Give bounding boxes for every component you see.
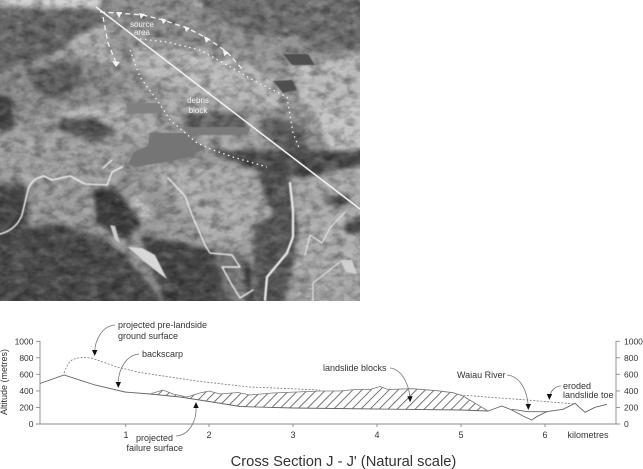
aerial photograph of landslide xyxy=(0,0,365,305)
ground profile line xyxy=(40,375,607,420)
callout: eroded landslide toe: landslide toe xyxy=(563,390,614,400)
callout: eroded landslide toe: eroded xyxy=(563,381,591,391)
section line J-J' xyxy=(96,7,360,209)
callout: landslide blocks xyxy=(323,363,413,402)
label: source area: area xyxy=(134,28,151,37)
x-axis labels: 6 xyxy=(542,430,548,440)
lakes and bright patches xyxy=(110,54,357,279)
right axis labels xyxy=(624,336,643,429)
landslide source area boundary, dashed xyxy=(100,12,243,70)
right axis labels: 600 xyxy=(624,370,638,380)
left axis labels: 600 xyxy=(19,370,34,380)
right axis labels: 200 xyxy=(624,402,638,412)
callout: projected failure surface: failure surface xyxy=(126,443,183,453)
right axis labels: 400 xyxy=(624,386,638,396)
cross-section chart xyxy=(0,320,643,453)
callout: Waiau River xyxy=(457,370,531,410)
label: source area: source xyxy=(130,20,155,29)
x-axis labels: 5 xyxy=(458,430,464,440)
label: debris block: debris xyxy=(187,96,209,105)
left axis labels: 400 xyxy=(19,386,34,396)
projected pre-landside ground surface, dashed xyxy=(64,358,575,404)
left axis labels: 0 xyxy=(29,419,34,429)
x-axis labels: 1 xyxy=(123,430,129,440)
right axis labels: 0 xyxy=(624,419,629,429)
top of landslide blocks outline xyxy=(150,386,488,411)
label: debris block xyxy=(188,97,209,113)
callout: backscarp xyxy=(116,349,183,388)
callout: Waiau River: Waiau River xyxy=(457,370,506,380)
callout: projected failure surface: projected xyxy=(136,433,173,443)
callout: projected pre-landside ground surface: projected pre-landside xyxy=(118,320,207,330)
chart axes xyxy=(36,341,620,427)
debris limits, dotted xyxy=(130,39,300,167)
callout: projected pre-landside ground surface xyxy=(92,320,207,356)
left axis labels: 800 xyxy=(19,353,34,363)
roads and rivers xyxy=(0,160,345,301)
left axis labels: 200 xyxy=(19,402,34,412)
x-axis labels xyxy=(123,430,609,440)
x-axis labels: 4 xyxy=(374,430,380,440)
right axis labels: 800 xyxy=(624,353,638,363)
label: debris block: block xyxy=(189,106,208,115)
x-axis labels: 3 xyxy=(290,430,296,440)
callout: backscarp: backscarp xyxy=(142,349,183,359)
label: source area xyxy=(130,22,154,35)
callout: landslide blocks: landslide blocks xyxy=(323,363,387,373)
left axis labels: 1000 xyxy=(15,336,34,346)
callout: projected failure surface xyxy=(126,402,199,453)
x-axis labels: 2 xyxy=(206,430,212,440)
left axis labels xyxy=(15,336,34,429)
callout: eroded landslide toe xyxy=(547,381,614,400)
callout: projected pre-landside ground surface: ground surface xyxy=(118,331,178,341)
river channel line xyxy=(512,409,547,412)
landslide blocks hatched area xyxy=(150,386,488,411)
x-axis labels: kilometres xyxy=(567,430,609,440)
right axis labels: 1000 xyxy=(624,336,643,346)
